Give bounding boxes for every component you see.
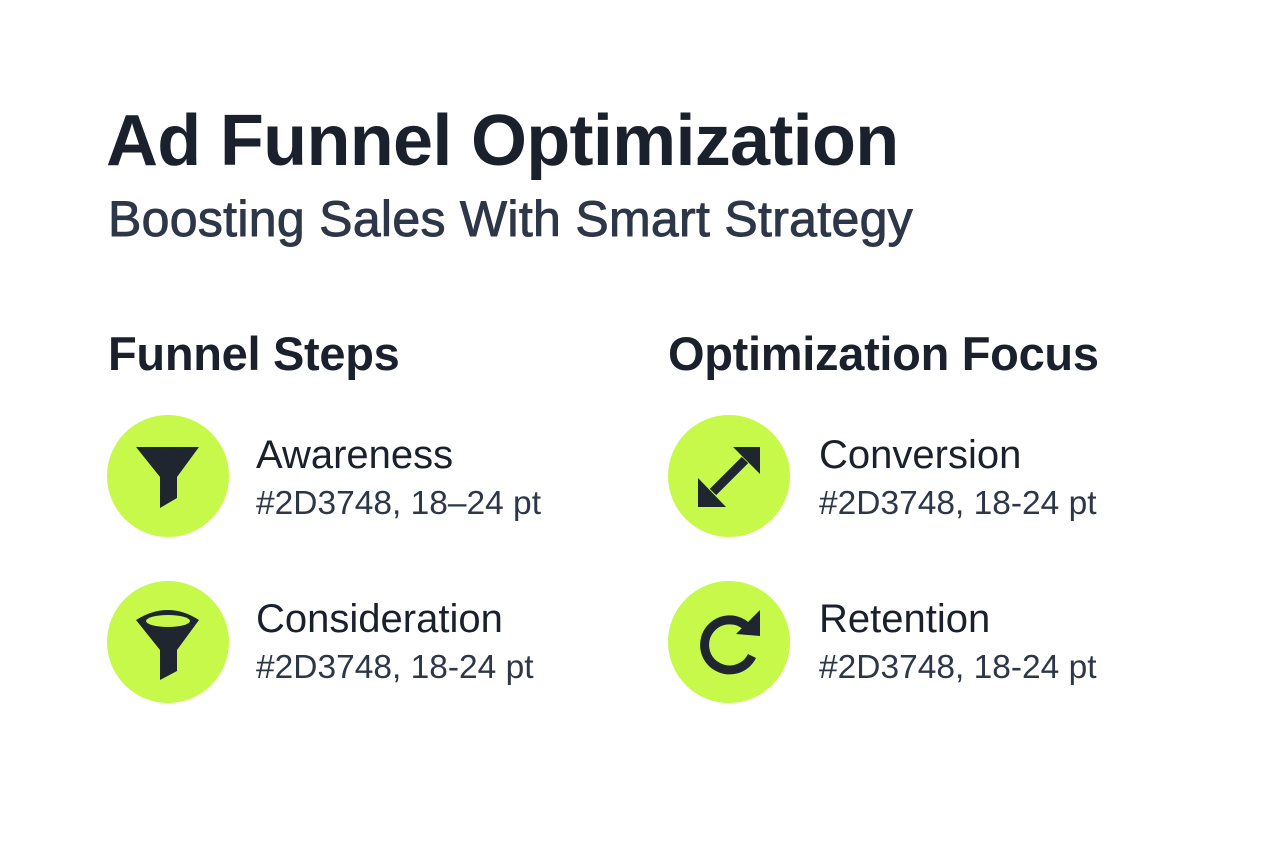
label: Conversion: Conversion xyxy=(819,433,1021,477)
label: Retention xyxy=(819,597,1097,686)
icon: filled funnel xyxy=(107,415,229,537)
icon: circular arrow xyxy=(668,581,790,703)
item: Retention xyxy=(668,581,1097,703)
item: Consideration xyxy=(107,581,534,703)
heading: Optimization Focus: Optimization Focus xyxy=(668,327,1099,380)
label: Consideration xyxy=(256,597,534,686)
label: Awareness xyxy=(256,433,542,522)
label: Retention: Retention xyxy=(819,597,990,641)
label: Conversion xyxy=(819,433,1097,522)
item: Conversion xyxy=(668,415,1097,537)
item: Awareness xyxy=(107,415,542,537)
label: Awareness: #2D3748, 18–24 pt xyxy=(256,485,542,522)
label: Awareness: Awareness xyxy=(256,433,453,477)
label: Conversion: #2D3748, 18-24 pt xyxy=(819,485,1097,522)
icon: open funnel xyxy=(107,581,229,703)
title: Ad Funnel Optimization xyxy=(106,101,899,181)
subtitle: Boosting Sales With Smart Strategy xyxy=(108,191,913,247)
icon: diagonal double arrow xyxy=(668,415,790,537)
label: Consideration: Consideration xyxy=(256,597,503,641)
label: Consideration: #2D3748, 18-24 pt xyxy=(256,649,534,686)
heading: Funnel Steps: Funnel Steps xyxy=(108,327,399,380)
label: Retention: #2D3748, 18-24 pt xyxy=(819,649,1097,686)
